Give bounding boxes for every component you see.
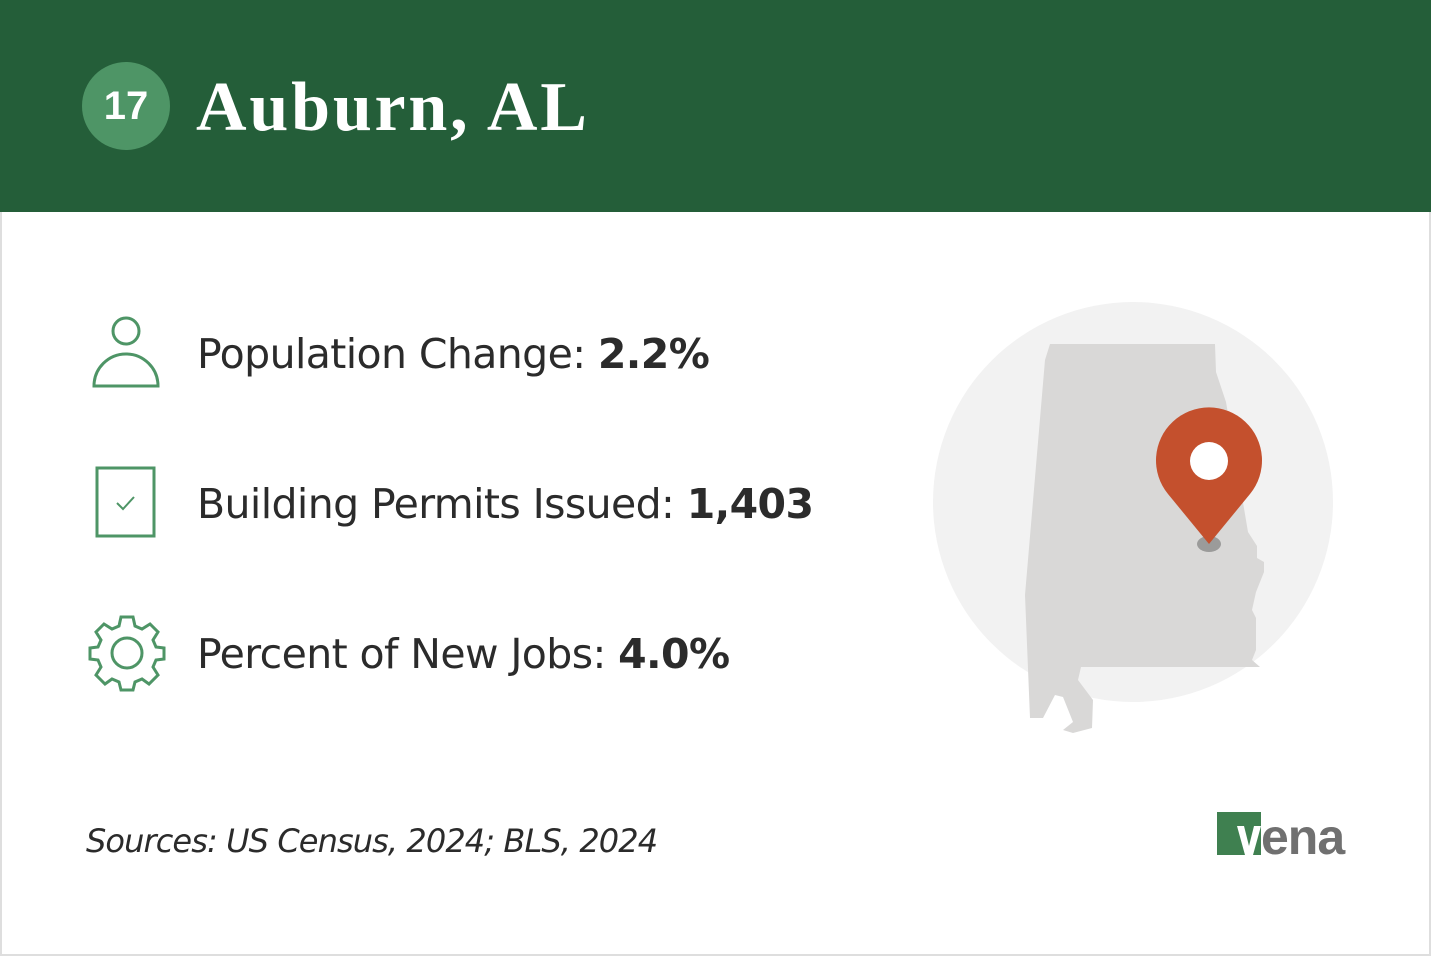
header bar (0, 0, 1431, 212)
rank badge: 17 (104, 84, 148, 128)
content frame (0, 212, 1431, 956)
title: Auburn, AL (196, 69, 590, 146)
stat: permits: Building Permits Issued: 1,403 (197, 480, 813, 528)
logo: vena (1217, 809, 1346, 865)
icon: person (92, 316, 160, 388)
rank badge (82, 62, 170, 150)
stat: jobs: Percent of New Jobs: 4.0% (197, 630, 729, 678)
sources: Sources: US Census, 2024; BLS, 2024 (86, 822, 657, 860)
stat: population: Population Change: 2.2% (197, 330, 709, 378)
icon: gear (88, 616, 166, 692)
logo: vena: ena (1261, 809, 1344, 865)
icon: checklist (96, 466, 156, 538)
